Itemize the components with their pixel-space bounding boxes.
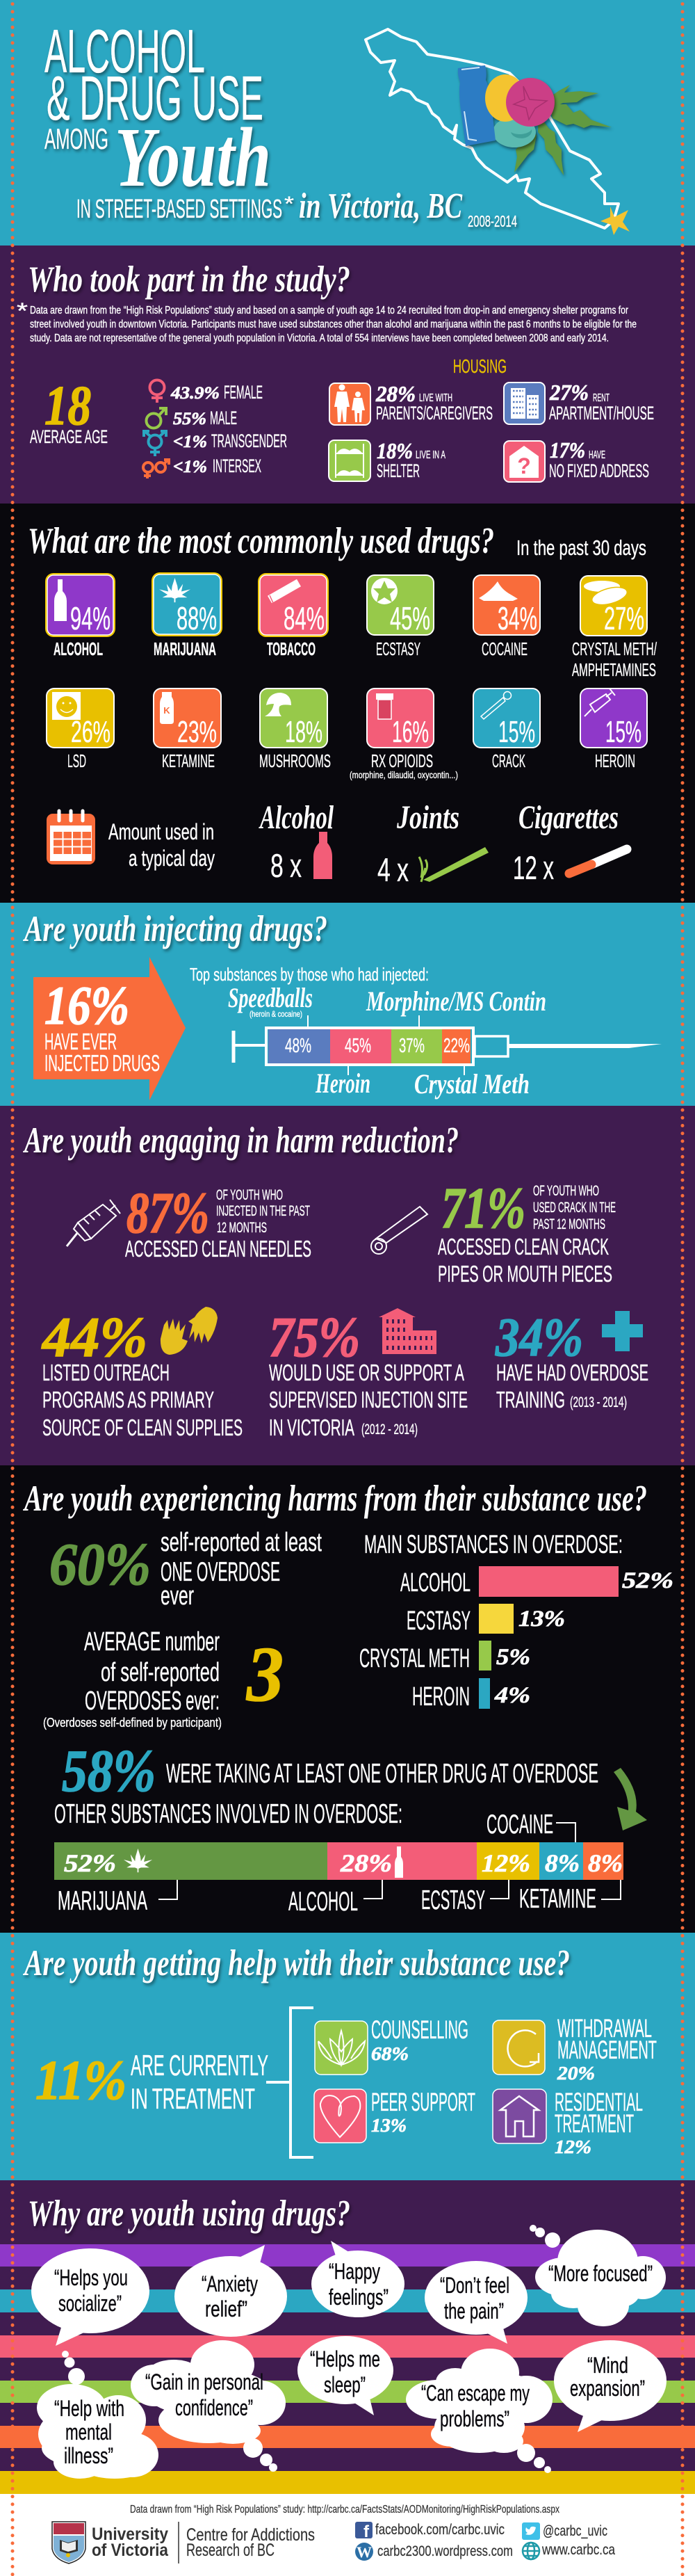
logo text: Centre for Addictions: Centre for Addictions: [186, 2525, 315, 2545]
stat: male: 55%: [173, 410, 206, 428]
chart: syringe of top substances: Heroin: [315, 1068, 370, 1099]
thought cloud: help with mental illness: illness”: [64, 2443, 113, 2468]
stat: outreach programs: LISTED OUTREACH: [42, 1360, 170, 1385]
speech bubble: mind expansion: expansion”: [570, 2376, 645, 2401]
stacked bar: other substances: OTHER SUBSTANCES INVOLVED IN OVERDOSE:: [54, 1799, 402, 1829]
tile: LSD: LSD: [67, 750, 86, 771]
stat: average number of overdoses: (Overdoses self-defined by participant): [43, 1716, 222, 1730]
chart: syringe of top substances: Crystal Meth: [414, 1068, 530, 1100]
arrow callout: 16%: HAVE EVER: [44, 1029, 117, 1054]
stat: cigarettes per day: 12 x: [513, 849, 554, 886]
icon: pills and bottle: [458, 65, 555, 147]
icon: syringe: [67, 1200, 120, 1246]
tile: RX opioids: RX OPIOIDS: [371, 750, 433, 771]
speech bubble: helps me sleep: “Helps me: [310, 2346, 380, 2372]
housing: parents: PARENTS/CAREGIVERS: [376, 403, 493, 424]
treatment: counselling: 68%: [371, 2043, 409, 2064]
stat: outreach programs: PROGRAMS AS PRIMARY: [42, 1387, 214, 1412]
stat: cigarettes per day: [513, 799, 627, 886]
tile: LSD: [47, 689, 114, 771]
stat: intersex: <1%: [173, 458, 207, 476]
stat: intersex: [143, 456, 261, 478]
subheading: Top substances by those who had injected:: [190, 964, 429, 985]
stat: in treatment: ARE CURRENTLY: [131, 2049, 268, 2082]
icon: globe: [523, 2543, 539, 2559]
icon: building: [379, 1308, 436, 1354]
stat: female: 43.9%: [170, 384, 220, 403]
tile: mushrooms: [259, 689, 331, 771]
stat: average age: [30, 376, 108, 447]
stat: male: [146, 408, 237, 428]
stat: cigarettes per day: Cigarettes: [518, 799, 619, 836]
speech bubble: helps me sleep: sleep”: [324, 2372, 366, 2397]
subheading: In the past 30 days: [516, 536, 646, 560]
tile: cocaine: 34%: [498, 600, 537, 636]
stat: one overdose: self-reported at least: [161, 1528, 322, 1557]
stacked bar: other substances: 28%: [340, 1849, 392, 1877]
stat: in treatment: IN TREATMENT: [131, 2082, 255, 2115]
tile: crack: CRACK: [492, 750, 525, 771]
stat: alcohol per day: Alcohol: [259, 799, 334, 836]
stat: in treatment: [35, 2049, 268, 2115]
icon: star marking Victoria: [600, 207, 630, 235]
stacked bar: other substances: 8%: [588, 1849, 623, 1877]
stat: average age: AVERAGE AGE: [30, 426, 108, 447]
stat: one overdose: [49, 1528, 322, 1611]
title: IN STREET-BASED SETTINGS: [76, 195, 282, 224]
stat: clean pipes: [438, 1176, 616, 1287]
tile: RX opioids: 16%: [392, 715, 429, 749]
logo text: Centre for Addictions: Research of BC: [186, 2541, 275, 2560]
thought cloud: help with mental illness: mental: [65, 2420, 112, 2445]
tile: crystal meth: 27%: [604, 600, 644, 636]
chart: syringe of top substances: 37%: [399, 1035, 425, 1057]
stat: transgender: <1%: [173, 433, 207, 451]
tile: ketamine: [154, 689, 221, 771]
tile: tobacco: 84%: [284, 600, 325, 636]
stacked bar: other substances: 12%: [482, 1849, 530, 1877]
stat: male: MALE: [210, 408, 237, 428]
stat: overdose training: [495, 1307, 648, 1412]
stat: clean needles: OF YOUTH WHO: [216, 1187, 283, 1203]
tile: heroin: 15%: [605, 715, 641, 749]
stat: other drug at overdose: [62, 1737, 598, 1804]
tile: marijuana: 88%: [177, 600, 217, 636]
tile: ecstasy: 45%: [390, 600, 430, 636]
stat: transgender: [144, 430, 287, 456]
link: twitter: @carbc_uvic: [543, 2523, 607, 2539]
panel: injecting drugs: [0, 903, 695, 1106]
logo text: University of Victoria: University: [92, 2525, 168, 2544]
stacked bar: other substances: 52%: [64, 1849, 116, 1877]
panel: getting help: [0, 1933, 695, 2180]
speech bubble: helps you socialize: [31, 2248, 149, 2346]
tile: alcohol: ALCOHOL: [54, 638, 103, 659]
thought cloud: help with mental illness: “Help with: [54, 2396, 124, 2421]
stat: overdose training: TRAINING: [496, 1387, 565, 1412]
logo text: Centre for Addictions: [186, 2525, 315, 2560]
speech bubble: happy feelings: “Happy: [329, 2259, 380, 2284]
link: website: www.carbc.ca: [541, 2542, 615, 2558]
stat: supervised injection site: WOULD USE OR SUPPORT A: [269, 1360, 464, 1385]
panel: who took part: [0, 245, 695, 504]
housing: rent: RENT: [593, 392, 610, 404]
stat: joints per day: Joints: [396, 799, 459, 836]
housing: shelter: [329, 438, 445, 481]
tile: mushrooms: 18%: [285, 715, 322, 749]
tile: alcohol: 94%: [70, 600, 111, 636]
housing: no fixed address: 17%: [550, 437, 585, 462]
arrow callout: 16%: 16%: [44, 975, 129, 1036]
arrow: [614, 1768, 647, 1830]
icon: facebook: f: [363, 2522, 370, 2541]
stat: average age: 18: [44, 376, 91, 437]
speech bubble: don't feel the pain: [425, 2261, 528, 2344]
speech bubble: mind expansion: “Mind: [587, 2353, 628, 2378]
housing: no fixed address: HAVE: [589, 449, 605, 461]
tile: LSD: 26%: [71, 715, 111, 749]
bar chart: main substances in overdose: 4%: [494, 1683, 530, 1708]
speech bubble: anxiety relief: [174, 2245, 287, 2337]
tile: mushrooms: MUSHROOMS: [259, 750, 331, 771]
stacked bar: other substances: KETAMINE: [519, 1884, 596, 1914]
tile: crystal meth: [572, 576, 657, 680]
bar chart: main substances in overdose: ECSTASY: [407, 1607, 471, 1636]
speech bubble: happy feelings: feelings”: [329, 2285, 389, 2310]
source note: Data drawn from “High Risk Populations” study: http://carbc.ca/FactsStats/AODMonitoring/HighRiskPopulations.aspx: [130, 2504, 559, 2515]
stat: intersex: INTERSEX: [213, 456, 261, 476]
stat: transgender: TRANSGENDER: [211, 430, 287, 451]
panel: harm reduction: [0, 1106, 695, 1465]
icon: twitter: [522, 2522, 540, 2540]
stat: clean pipes: OF YOUTH WHO: [533, 1183, 599, 1199]
tile: marijuana: [152, 572, 222, 659]
stat: clean pipes: USED CRACK IN THE: [533, 1200, 616, 1216]
stat: average number of overdoses: AVERAGE number: [84, 1627, 220, 1657]
text: amount used: Amount used in: [108, 819, 214, 844]
bar chart: main substances in overdose: ALCOHOL: [400, 1568, 471, 1597]
tile: ketamine: K: [163, 705, 170, 716]
bar chart: main substances in overdose: HEROIN: [412, 1682, 470, 1712]
heading: Who took part in the study?: [28, 259, 350, 300]
treatment: residential: [493, 2088, 643, 2157]
bracket: [266, 2008, 313, 2157]
tile: ecstasy: ECSTASY: [376, 638, 420, 659]
tile: crack: 15%: [498, 715, 535, 749]
title: & DRUG USE: [47, 64, 263, 134]
tile: alcohol: [45, 573, 115, 659]
stat: clean pipes: 71%: [441, 1176, 525, 1241]
tile: ecstasy: [367, 575, 434, 659]
icon: wordpress: W: [357, 2543, 372, 2561]
thought cloud: gain in personal confidence: “Gain in personal: [145, 2369, 263, 2394]
panel: header: [0, 0, 695, 245]
title: Youth: [115, 111, 271, 204]
treatment: residential: 12%: [555, 2136, 591, 2157]
panel: most commonly used drugs: [0, 504, 695, 903]
housing: no fixed address: [504, 437, 649, 482]
title: [44, 17, 517, 230]
chart: syringe of top substances: 45%: [345, 1035, 371, 1057]
speech bubble: mind expansion: [554, 2340, 667, 2432]
chart: syringe of top substances: Speedballs: [228, 982, 313, 1013]
thought cloud: more focused: “More focused”: [548, 2261, 653, 2286]
thought cloud: gain in personal confidence: confidence”: [175, 2395, 253, 2420]
chart: syringe of top substances: Morphine/MS Contin: [366, 985, 546, 1017]
tile: ketamine: KETAMINE: [162, 750, 215, 771]
panel: why youth use drugs: [0, 2180, 695, 2494]
stat: average number of overdoses: of self-reported: [101, 1658, 220, 1687]
chart: syringe of top substances: (heroin & cocaine): [250, 1009, 302, 1019]
heading: Are youth engaging in harm reduction?: [23, 1120, 459, 1161]
housing: rent: 27%: [549, 380, 589, 405]
speech bubble: anxiety relief: relief”: [205, 2296, 247, 2321]
stat: supervised injection site: SUPERVISED INJECTION SITE: [269, 1387, 468, 1412]
tile: cocaine: [473, 575, 540, 659]
housing: shelter: SHELTER: [377, 460, 420, 481]
thought cloud: can escape my problems: [406, 2349, 553, 2473]
heading: Why are youth using drugs?: [28, 2193, 350, 2234]
stat: alcohol per day: 8 x: [270, 847, 302, 884]
text block: study description: [17, 298, 637, 344]
treatment: peer support: [314, 2088, 475, 2143]
housing: parents: LIVE WITH: [419, 392, 452, 404]
bar chart: main substances in overdose: 52%: [622, 1568, 673, 1593]
title: AMONG: [44, 122, 108, 155]
stat: supervised injection site: (2012 - 2014): [361, 1422, 418, 1438]
thought cloud: gain in personal confidence: [131, 2340, 286, 2472]
stat: female: FEMALE: [224, 382, 263, 403]
heading: housing: HOUSING: [453, 355, 507, 377]
bar chart: main substances in overdose: [359, 1530, 673, 1712]
stat: alcohol per day: [259, 799, 334, 884]
logo text: University of Victoria: [92, 2525, 169, 2560]
treatment: peer support: 13%: [371, 2115, 407, 2136]
stat: clean needles: INJECTED IN THE PAST: [216, 1203, 310, 1219]
title: in Victoria, BC: [299, 186, 463, 226]
tile: heroin: HEROIN: [595, 750, 635, 771]
icon: medical cross: [602, 1311, 643, 1351]
stat: supervised injection site: [269, 1305, 468, 1440]
stat: supervised injection site: 75%: [269, 1305, 360, 1369]
arrow callout: 16%: INJECTED DRUGS: [44, 1050, 160, 1076]
stat: one overdose: ever: [161, 1581, 194, 1611]
thought cloud: help with mental illness: [37, 2351, 158, 2479]
arrow callout: 16%: [33, 957, 186, 1100]
bar chart: main substances in overdose: CRYSTAL METH: [359, 1644, 470, 1673]
stacked bar: other substances: COCAINE: [486, 1810, 553, 1840]
title: ALCOHOL: [44, 17, 205, 86]
icon: facebook: [355, 2522, 373, 2541]
tile: marijuana: MARIJUANA: [154, 638, 216, 659]
chart: syringe of top substances: 22%: [443, 1035, 470, 1057]
bar chart: main substances in overdose: 13%: [518, 1607, 565, 1632]
stat: other drug at overdose: 58%: [62, 1737, 156, 1804]
stat: clean pipes: PAST 12 MONTHS: [533, 1216, 605, 1232]
speech bubble: don't feel the pain: “Don’t feel: [440, 2273, 509, 2298]
link: facebook: facebook.com/carbc.uvic: [375, 2522, 505, 2538]
map of Vancouver Island: [366, 29, 619, 228]
stat: overdose training: (2013 - 2014): [570, 1394, 627, 1410]
speech bubble: happy feelings: [311, 2241, 404, 2317]
link: wordpress: carbc2300.wordpress.com: [377, 2543, 513, 2559]
stacked bar: other substances: [54, 1799, 623, 1917]
tile: cocaine: COCAINE: [482, 638, 528, 659]
housing: shelter: 18%: [377, 438, 413, 463]
stat: clean needles: ACCESSED CLEAN NEEDLES: [125, 1236, 311, 1262]
speech bubble: helps you socialize: socialize”: [58, 2291, 122, 2316]
stacked bar: other substances: 8%: [545, 1849, 580, 1877]
panel: footer: [0, 2494, 695, 2576]
stat: clean needles: 12 MONTHS: [217, 1220, 267, 1236]
text block: study description: *: [17, 298, 28, 323]
tile: RX opioids: [350, 689, 458, 780]
title: *: [284, 193, 294, 216]
stat: average number of overdoses: [43, 1627, 284, 1730]
stat: joints per day: [377, 799, 489, 888]
tile: crack: [473, 689, 540, 771]
stat: clean needles: 87%: [126, 1181, 209, 1246]
housing: shelter: LIVE IN A: [416, 449, 445, 461]
stat: clean needles: [125, 1181, 311, 1262]
tile: heroin: [580, 689, 647, 771]
stat: in treatment: 11%: [35, 2050, 126, 2111]
housing: parents: 28%: [375, 381, 416, 406]
tile: ketamine: 23%: [177, 715, 217, 749]
tile: tobacco: TOBACCO: [267, 638, 316, 659]
stat: joints per day: 4 x: [377, 851, 409, 888]
stat: outreach programs: [41, 1305, 243, 1440]
stacked bar: other substances: ALCOHOL: [288, 1887, 358, 1917]
text: amount used: [108, 819, 215, 871]
speech bubble: helps me sleep: [297, 2336, 393, 2415]
stat: supervised injection site: IN VICTORIA: [269, 1415, 354, 1440]
title: 2008-2014: [468, 212, 517, 230]
stacked bar: other substances: ECSTASY: [421, 1885, 485, 1915]
treatment: withdrawal management: [493, 2014, 657, 2084]
housing: no fixed address: ?: [517, 453, 531, 478]
thought cloud: can escape my problems: problems”: [440, 2406, 509, 2431]
logo: University of Victoria crest: [52, 2522, 85, 2563]
icon: cannabis leaf: [514, 85, 612, 175]
logo text: University of Victoria: of Victoria: [92, 2541, 169, 2560]
stat: one overdose: 60%: [49, 1531, 151, 1597]
stat: overdose training: 34%: [495, 1307, 583, 1367]
chart: syringe of top substances: [228, 982, 662, 1100]
tile: tobacco: [258, 573, 329, 659]
speech bubble: helps you socialize: “Helps you: [54, 2265, 128, 2290]
panel: harms from substance use: [0, 1465, 695, 1933]
stat: average number of overdoses: OVERDOSES ever:: [85, 1687, 220, 1716]
speech bubble: anxiety relief: “Anxiety: [202, 2271, 258, 2296]
icon: crack pipe: [371, 1207, 427, 1254]
stat: average number of overdoses: 3: [246, 1632, 284, 1718]
stacked bar: other substances: MARIJUANA: [58, 1886, 147, 1916]
thought cloud: more focused: [530, 2225, 666, 2326]
tile: RX opioids: (morphine, dilaudid, oxycontin...): [350, 769, 458, 780]
treatment: counselling: COUNSELLING: [371, 2015, 468, 2044]
text: amount used: a typical day: [129, 846, 215, 871]
housing: rent: [504, 380, 654, 424]
housing: parents: [329, 381, 493, 425]
treatment: counselling: [315, 2015, 468, 2075]
icon: hands: [161, 1307, 218, 1355]
stat: outreach programs: SOURCE OF CLEAN SUPPLIES: [42, 1415, 243, 1440]
chart: syringe of top substances: 48%: [285, 1035, 311, 1057]
stat: outreach programs: 44%: [41, 1305, 147, 1369]
speech bubble: don't feel the pain: the pain”: [444, 2299, 504, 2324]
treatment: peer support: PEER SUPPORT: [371, 2088, 475, 2116]
heading: Are youth injecting drugs?: [23, 909, 327, 949]
heading: What are the most commonly used drugs?: [28, 521, 494, 561]
icon: calendar: [47, 811, 95, 864]
bar chart: main substances in overdose: 5%: [496, 1645, 530, 1670]
treatment: withdrawal management: 20%: [557, 2063, 595, 2084]
stat: one overdose: ONE OVERDOSE: [161, 1557, 280, 1587]
thought cloud: can escape my problems: “Can escape my: [421, 2381, 530, 2406]
stat: female: [150, 380, 263, 403]
